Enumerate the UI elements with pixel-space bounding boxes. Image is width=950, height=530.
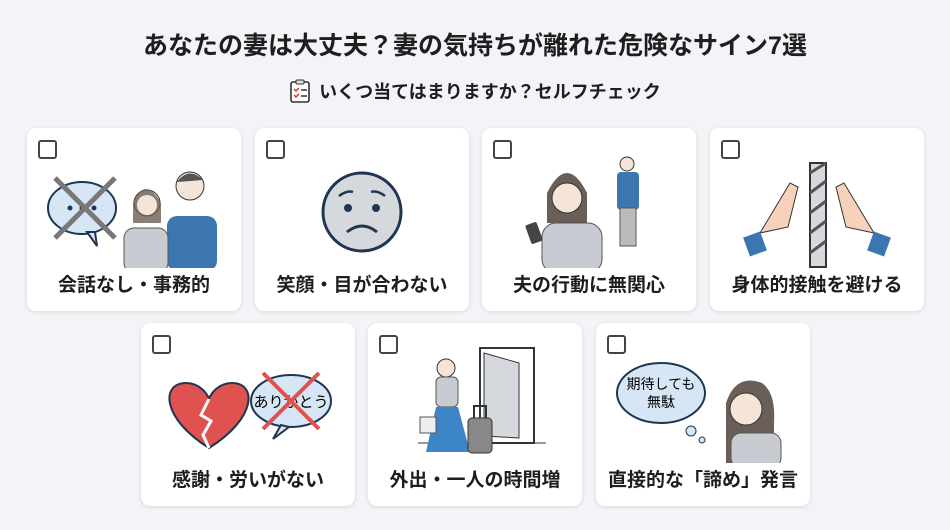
label: 外出・一人の時間増 [389,470,560,491]
panel: card 7 [596,323,810,506]
subtitle: いくつ当てはまりますか？セルフチェック [319,82,661,102]
illustration: broken heart, no thanks: ありがとう [253,391,329,412]
icon: sad face [322,172,402,252]
illustration: thought bubble and woman: 期待しても [627,374,695,394]
illustration: broken heart, no thanks [168,372,332,450]
illustration: no conversation couple [47,172,217,268]
illustration: thought bubble and woman: 無駄 [647,392,675,412]
illustration: woman leaving with suitcase [418,347,546,454]
icon: clipboard [290,80,310,103]
label: 夫の行動に無関心 [513,275,665,296]
panel: card 1 [27,128,241,311]
illustration: wife with phone, husband [525,156,639,268]
label: 身体的接触を避ける [731,275,902,296]
title: あなたの妻は大丈夫？妻の気持ちが離れた危険なサイン7選 [143,32,807,60]
panel: card 3 [482,128,696,311]
label: 笑顔・目が合わない [276,275,448,296]
panel: card 2 [255,128,469,311]
illustration: thought bubble and woman [616,362,782,463]
label: 会話なし・事務的 [58,275,210,296]
panel: card 6 [368,323,582,506]
label: 感謝・労いがない [172,470,324,491]
panel: card 5 [141,323,355,506]
panel: card 4 [710,128,924,311]
illustration: hands and wall [743,162,891,268]
label: 直接的な「諦め」発言 [608,470,798,491]
